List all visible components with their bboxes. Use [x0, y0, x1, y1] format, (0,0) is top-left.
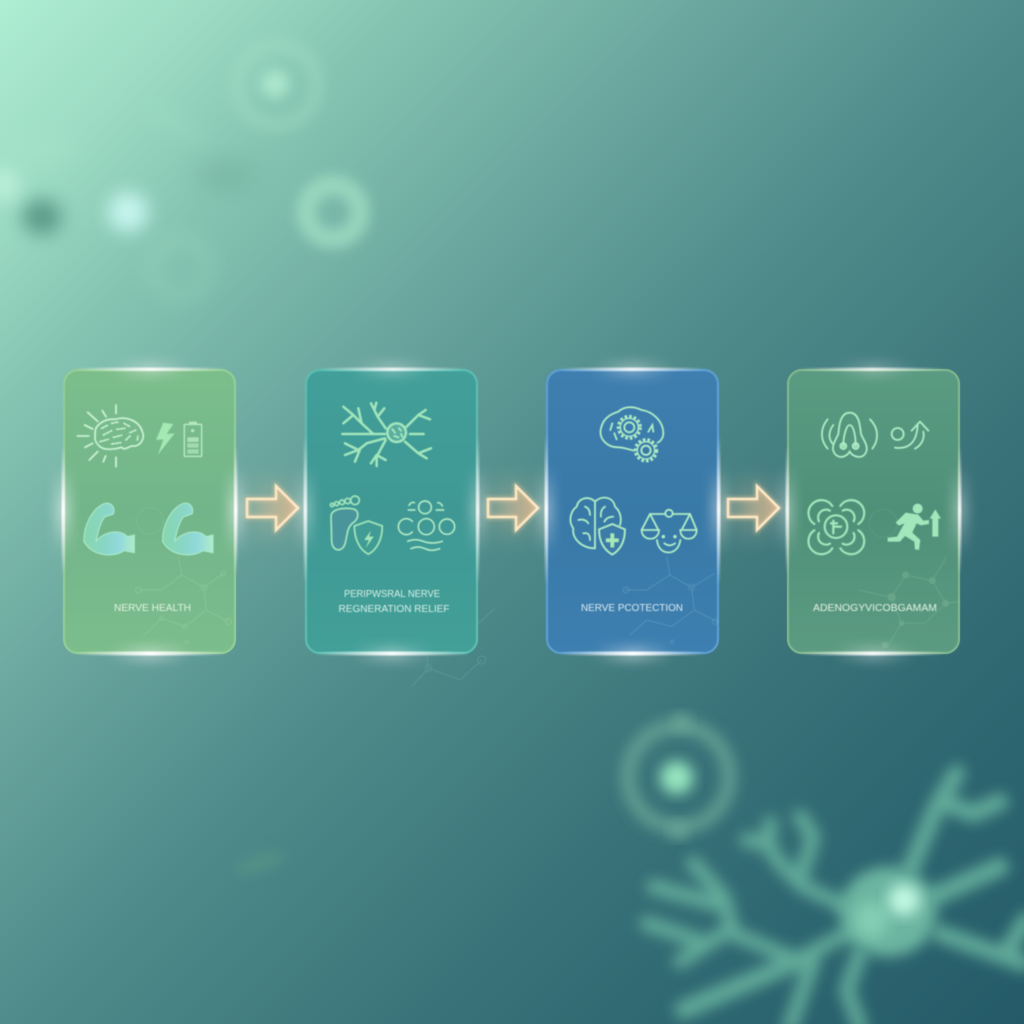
icon: neuron	[342, 403, 431, 466]
molecule pattern	[135, 507, 231, 643]
background: neuron soma	[840, 867, 937, 957]
panel glow accents	[56, 363, 243, 660]
background: faint green streak	[233, 847, 287, 879]
label: nerve protection: NERVE PCOTECTION	[581, 602, 683, 614]
background: blurred neuron bottom right	[647, 773, 1024, 1024]
panel glow accents	[298, 363, 485, 660]
label: peripheral nerve regeneration relief	[338, 589, 450, 615]
panel: nerve protection	[539, 363, 726, 660]
icon: brain with gears	[600, 407, 663, 461]
icon: battery	[184, 422, 202, 456]
molecule pattern	[858, 509, 960, 648]
icon: flexed arm left	[84, 503, 134, 555]
panel glow accents	[539, 363, 726, 660]
icon: foot with shield	[330, 496, 382, 554]
icon: running person with up arrow	[888, 504, 941, 550]
icon: brain with medical shield	[570, 498, 625, 555]
icon: balance scale with face	[642, 510, 697, 552]
background: blurred target ring bottom	[628, 713, 729, 839]
molecule pattern	[623, 557, 718, 643]
label: peripheral nerve regeneration relief: REGNERATION RELIEF	[338, 604, 450, 615]
panel: adenosylcobalamin	[780, 363, 967, 660]
icon: adenosyl molecule with sound arcs	[822, 413, 877, 457]
icon: glowing brain	[77, 405, 143, 467]
arrow 1	[244, 480, 300, 536]
icon: circles and waves	[398, 501, 455, 550]
arrow 3	[726, 480, 782, 536]
label: adenosylcobalamin: ADENOGYVICOBGAMAM	[813, 602, 937, 614]
icon: circle with rising arrow	[892, 422, 928, 449]
label: peripheral nerve regeneration relief: PERIPWSRAL NERVE	[344, 589, 440, 600]
panel glow accents	[780, 363, 967, 660]
label: nerve health: NERVE HEALTH	[114, 602, 191, 614]
background: blurred neural bokeh top left	[0, 45, 360, 296]
molecule behind card 2	[392, 523, 495, 687]
panel: peripheral nerve regeneration relief	[298, 363, 485, 660]
icon: lightning bolt	[156, 423, 175, 455]
panel: nerve health	[56, 363, 243, 660]
icon: flexed arm right	[163, 503, 213, 555]
icon: molecular knot	[808, 500, 864, 554]
arrow 2	[484, 480, 540, 536]
